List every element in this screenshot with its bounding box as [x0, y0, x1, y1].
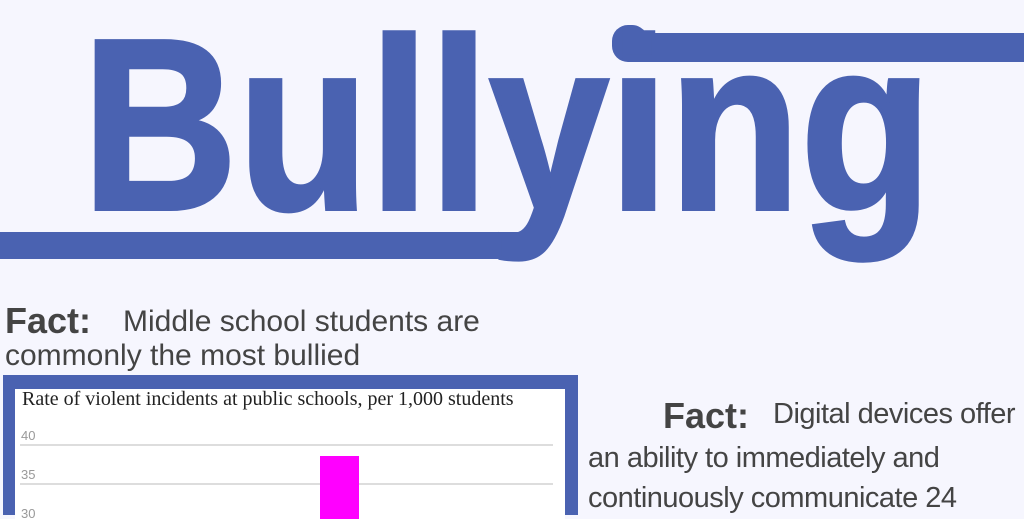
chart panel: [3, 375, 578, 515]
fact 1 heading: Fact:: [5, 300, 91, 341]
text: commonly the most bullied: [5, 339, 360, 372]
bar chart: 35: [21, 467, 35, 482]
bar chart: 40: [21, 428, 35, 443]
text: continuously communicate 24: [588, 482, 957, 514]
bar chart: [20, 428, 553, 519]
fact 1 text: Middle school students are: [123, 305, 480, 338]
chart title: Rate of violent incidents at public schools, per 1,000 students: [22, 388, 514, 410]
fact 2 text: Digital devices offer: [773, 398, 1015, 430]
text: an ability to immediately and: [588, 442, 939, 474]
fact 2 heading: Fact:: [663, 395, 749, 436]
